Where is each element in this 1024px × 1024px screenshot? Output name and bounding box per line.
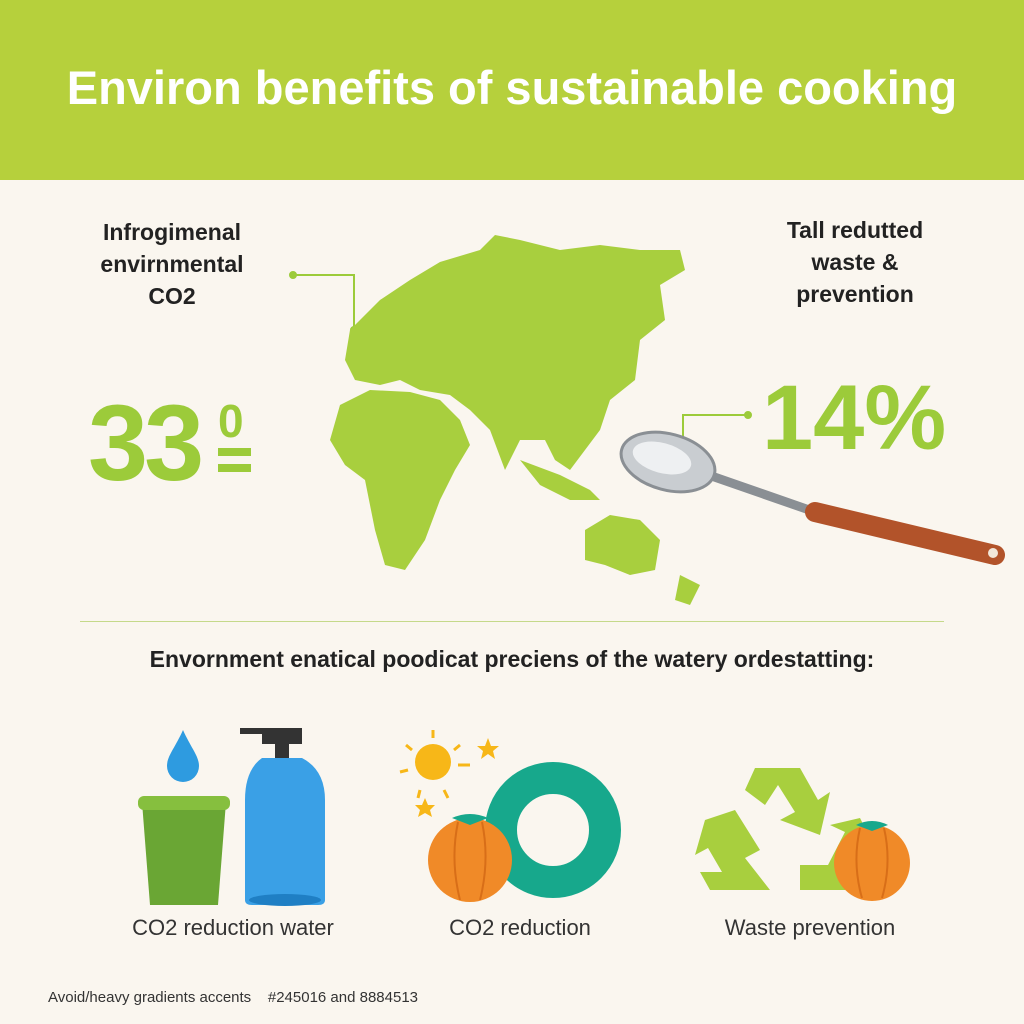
icon: recycle (695, 768, 880, 890)
footer note: Avoid/heavy gradients accents #245016 and 8884513 (48, 989, 418, 1006)
left stat: 0 (218, 395, 244, 447)
header band (0, 0, 1024, 180)
right stat: 14% (762, 367, 946, 469)
label 3: Waste prevention (725, 915, 895, 940)
icons (138, 728, 910, 906)
icon: sun and stars (400, 730, 499, 817)
map continents (330, 235, 700, 605)
icon: water drop (167, 730, 199, 782)
subheading: Envornment enatical poodicat preciens of the watery ordestatting: (150, 646, 874, 672)
world map with connectors and spoon (289, 235, 1005, 605)
icon: green cup (138, 796, 230, 905)
left stat: 33 (88, 382, 200, 503)
right heading: Tall redutted waste & prevention (787, 217, 923, 307)
icon: orange (428, 814, 512, 902)
icon: teal ring (501, 778, 605, 882)
connector left (290, 272, 357, 333)
icon: orange 2 (834, 821, 910, 901)
label 1: CO2 reduction water (132, 915, 334, 940)
icon: bottle (240, 728, 325, 906)
title: Environ benefits of sustainable cooking (67, 61, 957, 114)
label 2: CO2 reduction (449, 915, 591, 940)
left stat (88, 382, 251, 503)
spoon (614, 423, 998, 558)
connector right (683, 412, 751, 445)
left heading: Infrogimenal envirnmental CO2 (100, 219, 244, 309)
